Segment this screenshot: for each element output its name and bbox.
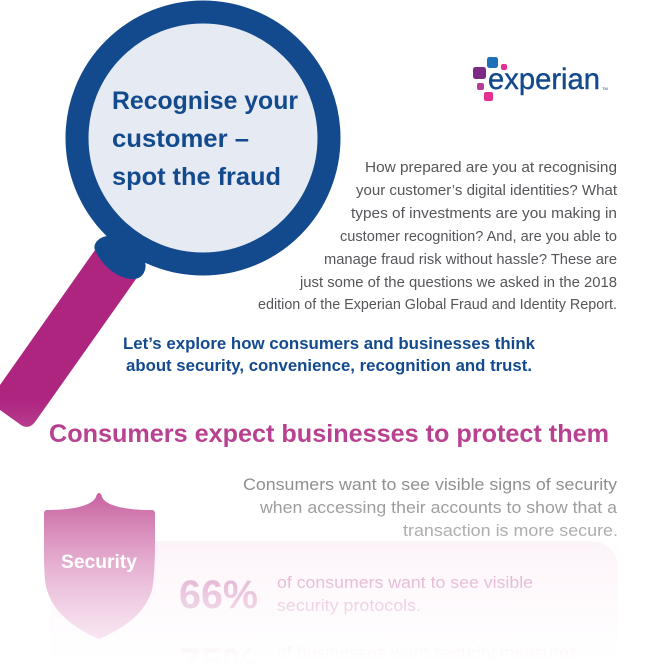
logo squares — [473, 57, 507, 101]
intro text: manage fraud risk without hassle? These are — [324, 252, 617, 268]
shield fade — [44, 493, 155, 639]
stat: 66%: 66% — [179, 573, 258, 617]
section intro text: transaction is more secure. — [403, 521, 618, 540]
title: spot the fraud — [112, 163, 281, 191]
intro text: your customer’s digital identities? What — [356, 183, 617, 199]
stat: 75% — [179, 641, 578, 668]
section heading: Consumers expect businesses to protect them — [49, 420, 609, 448]
stat: 66% — [179, 573, 533, 617]
intro text: How prepared are you at recognising — [365, 160, 617, 176]
section intro text: Consumers want to see visible signs of security — [243, 475, 618, 494]
magnifying glass — [0, 12, 329, 427]
shield label: Security — [61, 552, 137, 573]
intro text — [258, 160, 617, 313]
explore callout — [123, 335, 536, 375]
title — [112, 87, 298, 191]
intro text: just some of the questions we asked in the 2018 — [299, 275, 617, 291]
stat: 66%: of consumers want to see visible — [277, 573, 533, 592]
logo wordmark: experian — [488, 63, 600, 96]
magnifier neck — [94, 236, 146, 279]
stat: 66%: security protocols. — [277, 596, 421, 615]
explore callout: about security, convenience, recognition and trust. — [126, 357, 532, 375]
section intro text: when accessing their accounts to show that a — [259, 498, 618, 517]
title: customer – — [112, 125, 249, 153]
magnifier handle — [0, 250, 136, 427]
title: Recognise your — [112, 87, 298, 115]
stats panel — [51, 541, 618, 668]
stat: 75%: of businesses want security measures — [277, 643, 578, 662]
intro text: edition of the Experian Global Fraud and Identity Report. — [258, 297, 617, 313]
magnifier ring and lens — [77, 12, 329, 264]
security shield — [44, 493, 155, 639]
panel background — [51, 541, 618, 668]
shield shape — [44, 493, 155, 639]
section intro text — [243, 475, 618, 540]
explore callout: Let’s explore how consumers and businesses think — [123, 335, 536, 353]
experian logo — [473, 57, 608, 101]
fade overlay — [0, 400, 656, 668]
intro text: customer recognition? And, are you able to — [340, 229, 617, 245]
intro text: types of investments are you making in — [351, 206, 617, 222]
trademark: TM — [602, 86, 608, 91]
